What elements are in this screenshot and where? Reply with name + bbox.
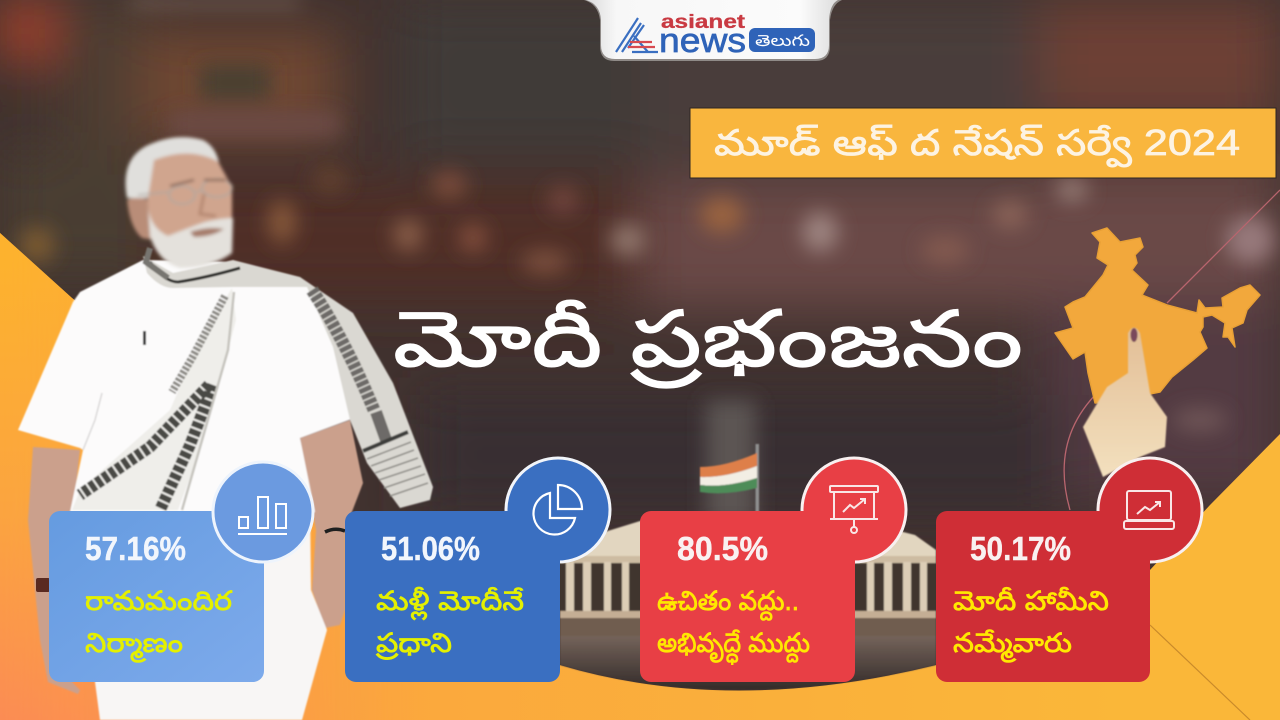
card 1: ram mandir: నిర్మాణం: [85, 628, 183, 663]
white trousers: [80, 500, 327, 720]
scarf flowing side: [143, 256, 433, 508]
wrist watch band and bracelet: [36, 529, 345, 592]
logo language badge: తెలుగు: [755, 33, 810, 50]
asianet news logo: [584, 0, 842, 61]
glasses: [138, 179, 232, 204]
hair: [126, 137, 219, 198]
orange background shapes: [0, 233, 1280, 720]
beard: [148, 206, 233, 268]
icon: laptop chart: [1124, 491, 1174, 529]
scarf pattern: [146, 248, 428, 496]
card 3: development not freebies: 80.5%: [677, 530, 768, 567]
decorative survey lines near map: [1064, 190, 1280, 510]
flag on pole: [700, 444, 759, 512]
india map: [1055, 228, 1260, 403]
scarf front fold: [72, 288, 236, 510]
card 3: development not freebies: అభివృద్ధే ముద్దు: [657, 628, 810, 665]
card 4: believers in modi's guarantee: [936, 458, 1202, 682]
card 2: modi again pm: 51.06%: [381, 530, 480, 567]
survey banner: [690, 108, 1276, 178]
shirt pocket pen: [143, 331, 146, 345]
card 1: ram mandir: [49, 462, 313, 682]
card 2: modi again pm: మళ్లీ మోదీనే: [376, 586, 524, 621]
modi figure: [18, 248, 433, 720]
icon: voting hand: [1083, 328, 1167, 477]
title: మోదీ ప్రభంజనం: [393, 295, 1023, 389]
brows and nose shadow: [170, 180, 226, 186]
card 4: believers in modi's guarantee: మోదీ హామీని: [953, 586, 1109, 616]
icon: bar chart circle: [213, 462, 313, 562]
parliament building: [560, 521, 936, 690]
logo language badge: [749, 28, 815, 52]
card 3: development not freebies: [640, 458, 906, 682]
card 2: modi again pm: ప్రధాని: [376, 628, 452, 660]
logo triangle mark: [616, 18, 658, 52]
arms and hands: [28, 420, 363, 694]
lips: [190, 228, 224, 237]
card 1: ram mandir: రామమందిర: [85, 586, 233, 616]
asianet news logo: news: [659, 22, 746, 60]
card 4: believers in modi's guarantee: నమ్మేవారు: [953, 628, 1072, 663]
white shirt: [18, 260, 368, 512]
asianet news logo: asianet: [661, 12, 746, 33]
modi head: [126, 137, 233, 268]
ear: [127, 197, 154, 240]
card 1: ram mandir: 57.16%: [85, 530, 186, 567]
survey banner: మూడ్ ఆఫ్ ద నేషన్ సర్వే 2024: [714, 122, 1240, 168]
card 2: modi again pm: [345, 458, 610, 682]
icon: presentation board: [830, 486, 878, 533]
card 3: development not freebies: ఉచితం వద్దు..: [657, 586, 799, 621]
card 4: believers in modi's guarantee: 50.17%: [970, 530, 1071, 567]
icon: pie chart: [533, 485, 582, 535]
face: [146, 143, 232, 262]
